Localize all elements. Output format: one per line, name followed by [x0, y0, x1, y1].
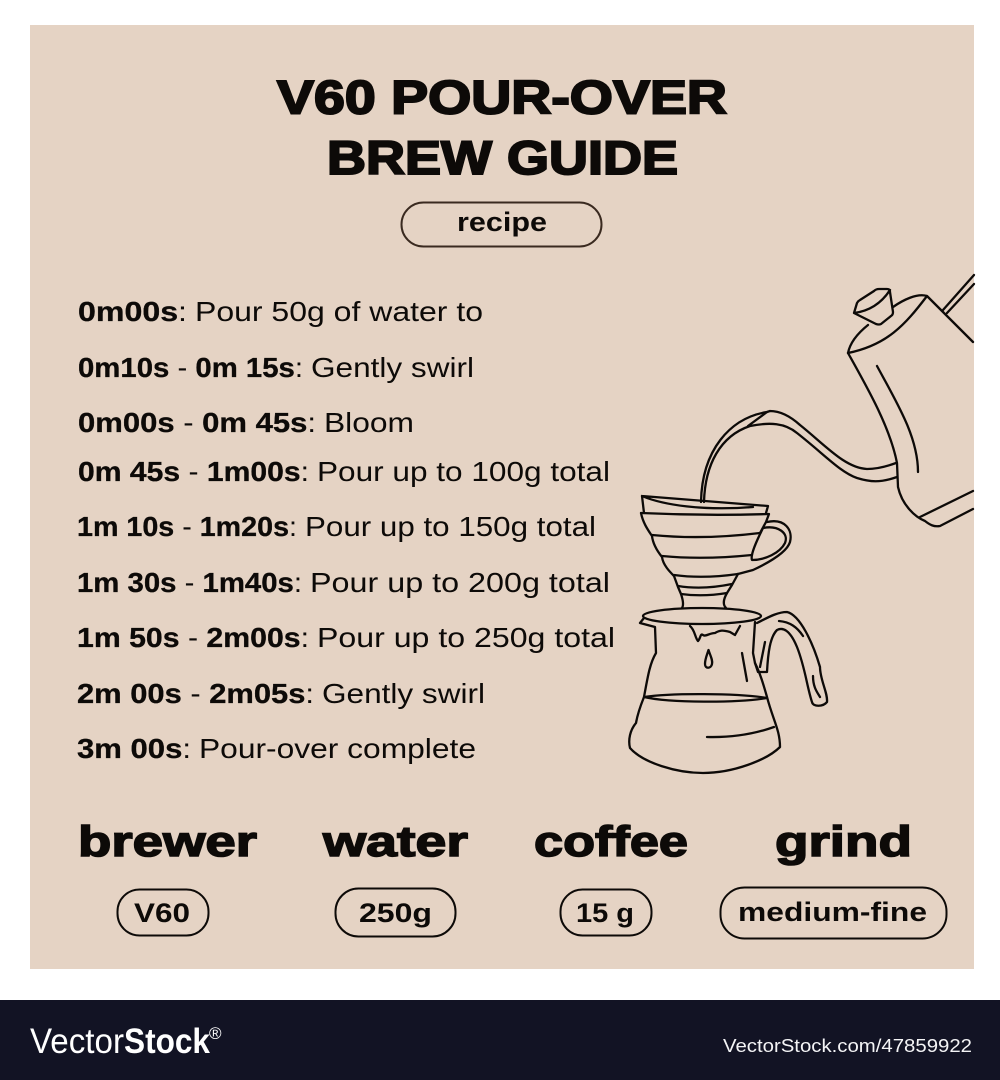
step 6	[77, 567, 610, 598]
recipe pill	[402, 202, 602, 246]
label: grind: grind	[775, 818, 912, 866]
pill: 15 g: 15 g	[576, 898, 634, 928]
label: coffee: coffee	[534, 818, 688, 866]
footer logo: Stock	[124, 1022, 210, 1061]
step 5: Pour up to 150g total	[305, 511, 596, 542]
pill: 250g	[336, 888, 456, 936]
footer logo	[30, 1022, 222, 1061]
step 6: Pour up to 200g total	[310, 567, 610, 598]
step 3: Bloom	[324, 407, 414, 438]
step 4: Pour up to 100g total	[317, 456, 610, 487]
step 4	[78, 456, 610, 487]
step 1	[78, 296, 483, 327]
pill: V60: V60	[134, 898, 190, 928]
step 1: 0m00s :	[78, 296, 187, 327]
step 3: 0m00s - 0m 45s :	[78, 407, 316, 438]
step 9	[77, 733, 476, 764]
pill: 250g: 250g	[359, 898, 432, 928]
step 5: 1m 10s - 1m20s:	[77, 511, 297, 542]
title: BREW GUIDE	[327, 132, 678, 185]
step 5	[77, 511, 596, 542]
step 7: Pour up to 250g total	[317, 622, 615, 653]
label: coffee	[534, 818, 688, 936]
footer band	[0, 1000, 1000, 1080]
step 2: Gently swirl	[311, 352, 474, 383]
title: V60 POUR-OVER	[277, 72, 727, 124]
pill: medium-fine: medium-fine	[738, 897, 927, 927]
label: water: water	[322, 818, 468, 866]
step 9: Pour-over complete	[199, 733, 476, 764]
footer logo: ®	[209, 1024, 222, 1043]
pill: 15 g	[560, 890, 652, 936]
icon: gooseneck kettle pouring	[701, 275, 974, 526]
label: brewer: brewer	[78, 818, 257, 866]
step 4: 0m 45s - 1m00s :	[78, 456, 309, 487]
step 7	[77, 622, 615, 653]
step 8: 2m 00s - 2m05s :	[77, 678, 314, 709]
step 6: 1m 30s - 1m40s:	[77, 567, 302, 598]
pill: V60	[118, 890, 208, 936]
title	[277, 72, 727, 185]
step 2: 0m10s - 0m 15s:	[78, 352, 303, 383]
footer image id: VectorStock.com/47859922	[723, 1036, 972, 1056]
step 2	[78, 352, 474, 383]
icon: glass server with coffee	[629, 608, 827, 773]
label: brewer	[78, 818, 257, 936]
step 1: Pour 50g of water to	[195, 296, 483, 327]
label: grind	[720, 818, 946, 938]
icon: V60 dripper	[641, 496, 791, 608]
pill: medium-fine	[720, 888, 946, 938]
step 8: Gently swirl	[322, 678, 485, 709]
label: water	[322, 818, 468, 936]
step 8	[77, 678, 485, 709]
step 7: 1m 50s - 2m00s :	[77, 622, 309, 653]
footer logo: Vector	[30, 1022, 124, 1061]
step 9: 3m 00s :	[77, 733, 191, 764]
recipe steps list	[77, 296, 615, 764]
recipe pill: recipe	[457, 207, 547, 237]
